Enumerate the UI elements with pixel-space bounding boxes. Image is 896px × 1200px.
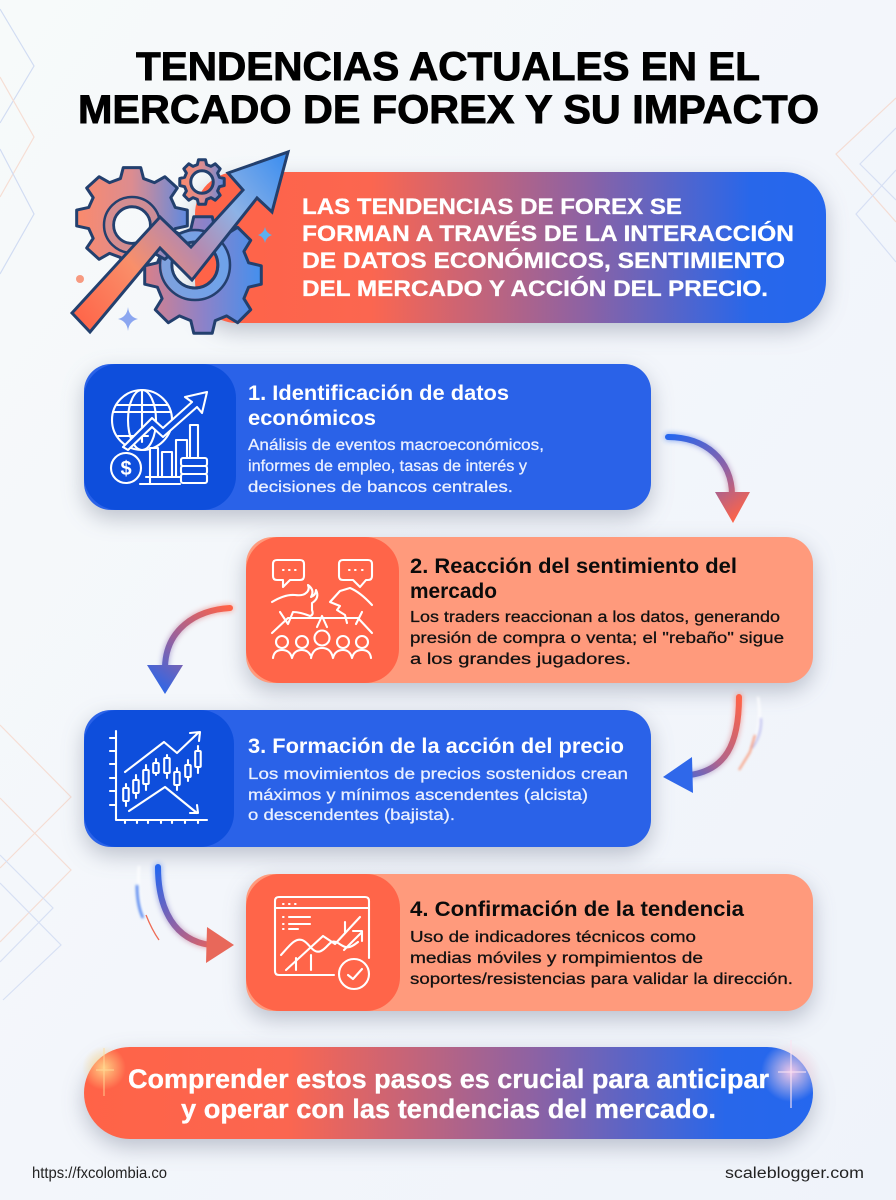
icon: bull, bear and crowd (272, 560, 372, 658)
step 2 description (410, 609, 784, 668)
step 2 heading: mercado (410, 580, 497, 603)
step 4 description: soportes/resistencias para validar la dirección. (410, 971, 793, 988)
closing message: Comprender estos pasos es crucial para anticipar (128, 1064, 769, 1094)
icon: gears and rising arrow (72, 152, 288, 333)
icon: indicator window and check (275, 897, 369, 989)
step 1 description (248, 437, 544, 496)
panel: step 2 (246, 537, 813, 683)
step 4 heading: 4. Confirmación de la tendencia (410, 898, 744, 921)
step 1 description: decisiones de bancos centrales. (248, 479, 513, 496)
step 2 description: Los traders reaccionan a los datos, generando (410, 609, 780, 626)
title: TENDENCIAS ACTUALES EN EL (136, 45, 760, 89)
step 3 heading: 3. Formación de la acción del precio (248, 735, 624, 758)
arrow: step 2 to step 3 (147, 608, 230, 694)
intro text: LAS TENDENCIAS DE FOREX SE (302, 194, 682, 219)
step 4 description: Uso de indicadores técnicos como (410, 929, 696, 946)
step 1 heading: 1. Identificación de datos (248, 382, 509, 405)
step 1 description: informes de empleo, tasas de interés y (248, 458, 527, 475)
intro text: DEL MERCADO Y ACCIÓN DEL PRECIO. (302, 276, 768, 301)
title: MERCADO DE FOREX Y SU IMPACTO (78, 88, 819, 132)
icon: globe, chart and coins: $ (120, 458, 132, 480)
icon block: step 2 (246, 537, 399, 683)
panel: step 1 (84, 364, 651, 510)
title (78, 45, 819, 132)
step 2 heading (410, 555, 737, 603)
step 1 heading: económicos (248, 407, 376, 430)
icon: globe, chart and coins (111, 390, 207, 484)
step 3 description: Los movimientos de precios sostenidos crean (248, 766, 628, 783)
step 3 description: o descendentes (bajista). (248, 807, 455, 824)
intro text (302, 194, 794, 301)
step 2 description: a los grandes jugadores. (410, 651, 631, 668)
intro text: FORMAN A TRAVÉS DE LA INTERACCIÓN (302, 221, 794, 246)
arrow: step 1 to step 2 (668, 437, 750, 523)
step 1 heading (248, 382, 509, 430)
footer url right: scaleblogger.com (725, 1165, 864, 1182)
step 3 description (248, 766, 628, 824)
sparkle: left (82, 1046, 126, 1096)
icon block: step 1 (84, 364, 236, 510)
step 2 heading: 2. Reacción del sentimiento del (410, 555, 737, 578)
step 4 description (410, 929, 793, 988)
sparkle: right (761, 1040, 821, 1108)
footer url left: https://fxcolombia.co (32, 1165, 167, 1182)
step 2 description: presión de compra o venta; el "rebaño" sigue (410, 630, 784, 647)
icon block: step 4 (246, 874, 400, 1011)
step 1 description: Análisis de eventos macroeconómicos, (248, 437, 544, 454)
intro text: DE DATOS ECONÓMICOS, SENTIMIENTO (302, 248, 785, 273)
panel: step 4 (246, 874, 813, 1011)
arrow: step 2 to step 3 return (663, 697, 761, 793)
panel: step 3 (84, 710, 651, 847)
closing message: y operar con las tendencias del mercado. (181, 1094, 716, 1124)
arrow: step 3 to step 4 (137, 866, 234, 963)
panel: closing banner (82, 1040, 821, 1139)
icon: candlestick chart (110, 731, 207, 823)
panel: intro banner (195, 172, 826, 323)
step 3 description: máximos y mínimos ascendentes (alcista) (248, 787, 588, 804)
icon block: step 3 (84, 710, 234, 847)
closing message (128, 1064, 769, 1124)
step 4 description: medias móviles y rompimientos de (410, 950, 703, 967)
